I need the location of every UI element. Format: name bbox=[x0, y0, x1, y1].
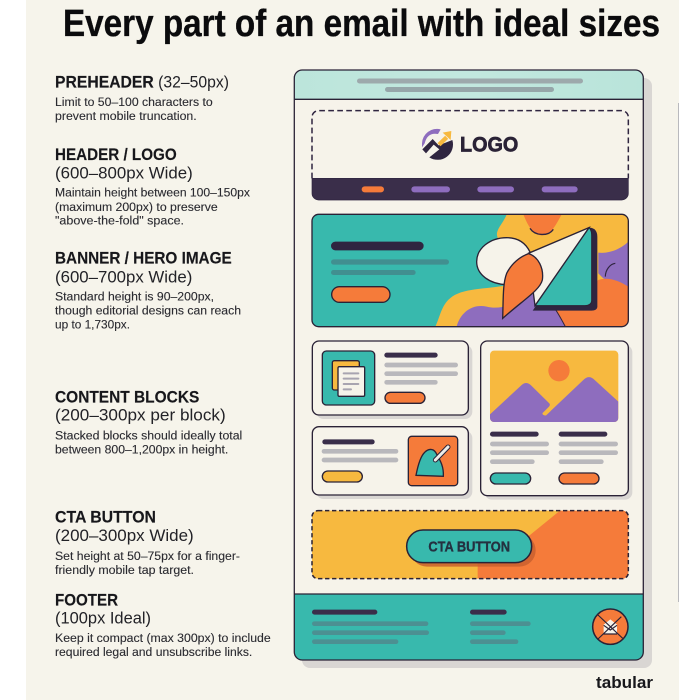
panel: content blocks bbox=[312, 341, 632, 500]
text block: footer bbox=[55, 591, 271, 659]
text block: banner / hero image: up to 1,730px. bbox=[55, 318, 130, 332]
email mockup bbox=[294, 70, 652, 668]
text block: header / logo: HEADER / LOGO bbox=[55, 146, 177, 164]
text block: header / logo bbox=[55, 146, 250, 228]
text block: footer: Keep it compact (max 300px) to include bbox=[55, 631, 271, 645]
purple right blob bbox=[598, 242, 628, 290]
text block: banner / hero image: Standard height is 90–200px, bbox=[55, 290, 214, 304]
text block: header / logo: (600–800px Wide) bbox=[55, 164, 193, 182]
text block: banner / hero image: (600–700px Wide) bbox=[55, 268, 192, 286]
white blob bbox=[477, 238, 530, 285]
text block: preheader bbox=[55, 74, 229, 123]
card body bbox=[294, 70, 643, 660]
block: icon card bbox=[312, 427, 472, 499]
paper plane white face bbox=[528, 228, 589, 306]
text block: footer: required legal and unsubscribe links. bbox=[55, 645, 252, 659]
text block: cta button: CTA BUTTON bbox=[55, 509, 156, 527]
text block: content blocks bbox=[55, 388, 242, 457]
text block: cta button: (200–300px Wide) bbox=[55, 527, 194, 545]
text block: banner / hero image: though editorial designs can reach bbox=[55, 304, 241, 318]
navigation bar bbox=[312, 178, 628, 200]
text block: cta button bbox=[55, 509, 240, 577]
text block: cta button: friendly mobile tap target. bbox=[55, 563, 194, 577]
purple bottom blob bbox=[457, 293, 565, 327]
text block: banner / hero image bbox=[55, 249, 241, 332]
text block: preheader: Limit to 50–100 characters to bbox=[55, 95, 213, 109]
hero button bbox=[332, 287, 390, 302]
text block: header / logo: (maximum 200px) to preserve bbox=[55, 200, 218, 214]
text block: content blocks: (200–300px per block) bbox=[55, 407, 226, 425]
paper plane teal face bbox=[535, 228, 592, 306]
text block: header / logo: "above-the-fold" space. bbox=[55, 214, 184, 228]
panel: hero banner bbox=[312, 214, 628, 327]
block: document card bbox=[312, 341, 472, 419]
orange top blob bbox=[523, 214, 562, 235]
text block: cta button: Set height at 50–75px for a finger- bbox=[55, 549, 240, 563]
hero text lines bbox=[331, 259, 449, 275]
text block: content blocks: CONTENT BLOCKS bbox=[55, 388, 199, 406]
cta button: CTA BUTTON bbox=[428, 539, 510, 555]
text block: banner / hero image: BANNER / HERO IMAGE bbox=[55, 249, 232, 267]
card shadow bbox=[302, 78, 652, 668]
logo wordmark: LOGO bbox=[460, 132, 518, 157]
yellow blob bbox=[435, 214, 628, 327]
text block: footer: (100px Ideal) bbox=[55, 610, 151, 628]
icon: logo mark bbox=[422, 129, 453, 160]
image: mountains and sun bbox=[490, 351, 618, 422]
panel: preheader strip bbox=[294, 70, 643, 99]
orange bottom right blob bbox=[556, 278, 628, 326]
icon: unsubscribe bbox=[593, 609, 628, 644]
block: image card bbox=[481, 341, 632, 500]
text block: preheader: PREHEADER (32–50px) bbox=[55, 74, 229, 92]
cta button bbox=[407, 530, 536, 567]
panel: logo header bbox=[312, 111, 628, 200]
text block: footer: FOOTER bbox=[55, 591, 118, 609]
panel: footer bbox=[294, 594, 643, 660]
text block: header / logo: Maintain height between 100–150px bbox=[55, 186, 250, 200]
orange leaf bbox=[503, 254, 543, 318]
text block: preheader: prevent mobile truncation. bbox=[55, 109, 197, 123]
hero headline bar bbox=[331, 242, 424, 250]
text block: content blocks: between 800–1,200px in height. bbox=[55, 443, 228, 457]
panel: cta band bbox=[312, 511, 628, 579]
icon: documents bbox=[322, 351, 375, 405]
icon: scoop bbox=[408, 436, 458, 486]
brand wordmark: tabular bbox=[596, 673, 653, 692]
text block: content blocks: Stacked blocks should ideally total bbox=[55, 428, 242, 442]
card outline bbox=[294, 70, 643, 660]
paper plane shadow bbox=[533, 228, 597, 311]
